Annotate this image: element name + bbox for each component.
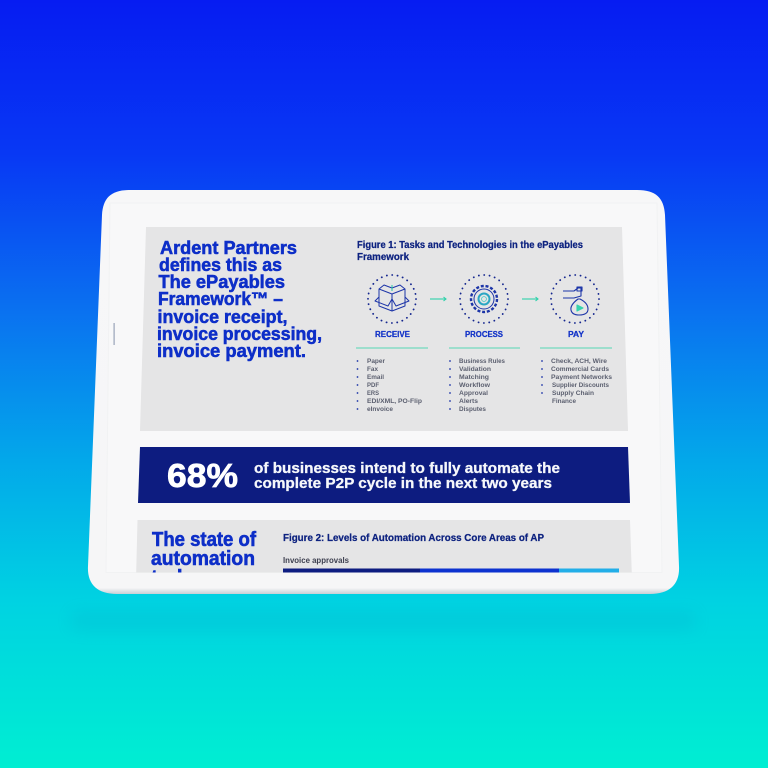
icon: receive box (368, 275, 416, 323)
stacked bar chart (283, 568, 619, 572)
panel background (140, 227, 628, 431)
statistic description (254, 460, 560, 492)
side button (114, 323, 115, 345)
tablet shadow (72, 612, 695, 630)
heading: state of automation: automation (151, 548, 255, 570)
list: receive: Fax (367, 366, 378, 373)
list: process: Business Rules (459, 358, 505, 365)
screen content (136, 227, 632, 589)
list: process: Approval (459, 390, 488, 397)
heading: Ardent Partners definition: Ardent Partners (160, 238, 297, 258)
tablet body (88, 190, 679, 594)
column labels: RECEIVE (375, 329, 410, 339)
column labels: PAY (568, 329, 584, 339)
heading: state of automation: The state of (152, 529, 256, 551)
figure 1 title: Framework (357, 252, 410, 263)
heading: state of automation (151, 530, 256, 572)
heading: Ardent Partners definition: invoice receipt, (158, 307, 288, 327)
panel: ePayables framework (140, 227, 628, 431)
heading: Ardent Partners definition (157, 238, 322, 361)
list: pay: Payment Networks (551, 374, 612, 381)
list: receive: Paper (367, 358, 385, 365)
screen outline (106, 203, 662, 572)
column labels: PROCESS (465, 329, 503, 339)
heading: Ardent Partners definition: The ePayables (158, 272, 285, 292)
statistic description: of businesses intend to fully automate the (254, 460, 560, 477)
list: receive: Email (367, 374, 384, 381)
heading: Ardent Partners definition: defines this as (159, 255, 282, 275)
figure 1 title (358, 240, 583, 260)
statistic description: complete P2P cycle in the next two years (254, 475, 552, 492)
tablet device (88, 190, 679, 594)
list: pay (541, 358, 612, 405)
list: process: Disputes (459, 406, 486, 413)
list: pay: Commercial Cards (551, 366, 609, 373)
banner background (138, 447, 630, 503)
list: process (449, 358, 505, 413)
list: process: Matching (459, 374, 489, 381)
statistic number: 68% (167, 457, 238, 494)
list: receive: PDF (367, 382, 379, 389)
list: pay: Supplier Discounts (552, 382, 609, 389)
list: pay: Supply Chain (552, 390, 594, 397)
icon: process gear (460, 275, 508, 323)
list: process: Workflow (459, 382, 491, 389)
list: receive (357, 358, 422, 413)
column dividers (356, 348, 612, 349)
arrow: receive to process (430, 297, 446, 301)
banner: 68% statistic (138, 447, 630, 503)
list: process: Validation (459, 366, 491, 373)
figure 1 title: Figure 1: Tasks and Technologies in the ePayables (357, 240, 584, 251)
figure 2 title: Figure 2: Levels of Automation Across Core Areas of AP (283, 533, 544, 544)
list: receive: ERS (367, 390, 380, 397)
heading: Ardent Partners definition: invoice processing, (157, 324, 322, 344)
heading: state of automation: today (151, 567, 206, 589)
list: receive: EDI/XML, PO-Flip (367, 398, 422, 405)
panel: state of automation (136, 520, 632, 572)
arrow: process to pay (522, 297, 538, 301)
icon: pay money bag and hand (551, 275, 599, 323)
heading: Ardent Partners definition: invoice payment. (157, 341, 306, 361)
heading: Ardent Partners definition: Framework™ – (158, 289, 283, 309)
chart label: Invoice approvals (283, 556, 349, 565)
list: process: Alerts (459, 398, 478, 405)
list: pay: Finance (552, 398, 576, 405)
panel background (136, 520, 632, 572)
list: pay: Check, ACH, Wire (551, 358, 607, 365)
column labels (375, 330, 584, 338)
list: receive: eInvoice (367, 406, 393, 413)
